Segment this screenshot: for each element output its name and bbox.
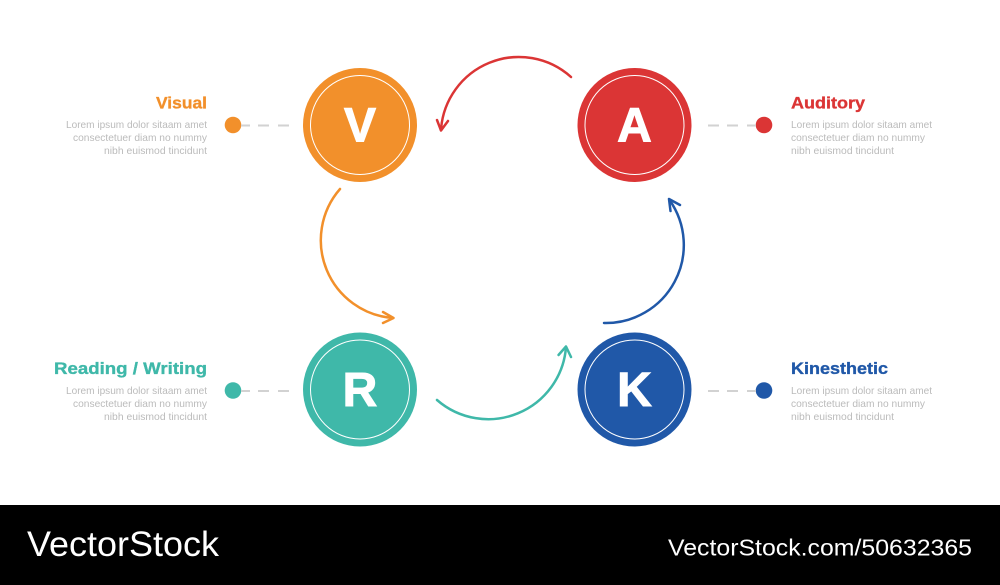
connector: Visual dot and dashes <box>225 117 289 133</box>
panel: Reading / Writing <box>54 332 417 446</box>
icon: A circle: A <box>617 100 652 152</box>
connector: Auditory dot and dashes <box>708 117 772 133</box>
panel: Kinesthetic <box>578 332 932 446</box>
heading: Kinesthetic: Kinesthetic <box>791 359 888 378</box>
icon: K circle: K <box>617 364 652 417</box>
icon: R circle <box>303 332 417 446</box>
footer url text: VectorStock.com/50632365 <box>668 534 972 560</box>
text block: Kinesthetic description: Lorem ipsum dolor sitaam amet <box>791 385 932 397</box>
icon: A circle <box>578 68 692 182</box>
footer bar <box>0 505 1000 585</box>
text block: Auditory description <box>791 119 932 157</box>
arrow: Reading to Kinesthetic <box>437 346 571 419</box>
text block: Visual description <box>66 119 208 157</box>
text block: Kinesthetic description <box>791 385 932 423</box>
panel: Visual <box>66 68 417 182</box>
text block: Kinesthetic description: nibh euismod tincidunt <box>791 411 894 423</box>
heading: Reading / Writing: Reading / Writing <box>54 359 207 378</box>
text block: Visual description: Lorem ipsum dolor sitaam amet <box>66 119 207 131</box>
text block: Auditory description: nibh euismod tincidunt <box>791 145 894 157</box>
text block: Reading / Writing description: consectetuer diam no nummy <box>73 398 208 410</box>
text block: Reading / Writing description <box>66 385 208 423</box>
arrow: Visual to Reading <box>321 189 394 323</box>
icon: K circle <box>578 332 692 446</box>
heading: Visual: Visual <box>156 94 207 112</box>
text block: Kinesthetic description: consectetuer diam no nummy <box>791 398 926 410</box>
text block: Auditory description: Lorem ipsum dolor sitaam amet <box>791 119 932 131</box>
connector: Kinesthetic dot and dashes <box>708 382 772 399</box>
connector: Reading / Writing dot and dashes <box>225 382 289 399</box>
text block: Reading / Writing description: nibh euismod tincidunt <box>104 411 207 423</box>
icon: R circle: R <box>343 364 377 417</box>
icon: V circle: V <box>344 100 376 152</box>
arrow: Auditory to Visual <box>437 57 571 131</box>
footer logo text: VectorStock <box>27 525 220 564</box>
arrow: Kinesthetic to Auditory <box>604 199 684 323</box>
text block: Visual description: nibh euismod tincidunt <box>104 145 207 157</box>
text block: Auditory description: consectetuer diam no nummy <box>791 132 926 144</box>
heading: Auditory: Auditory <box>791 94 866 112</box>
panel: Auditory <box>578 68 932 182</box>
icon: V circle <box>303 68 417 182</box>
text block: Reading / Writing description: Lorem ipsum dolor sitaam amet <box>66 385 207 397</box>
text block: Visual description: consectetuer diam no nummy <box>73 132 208 144</box>
